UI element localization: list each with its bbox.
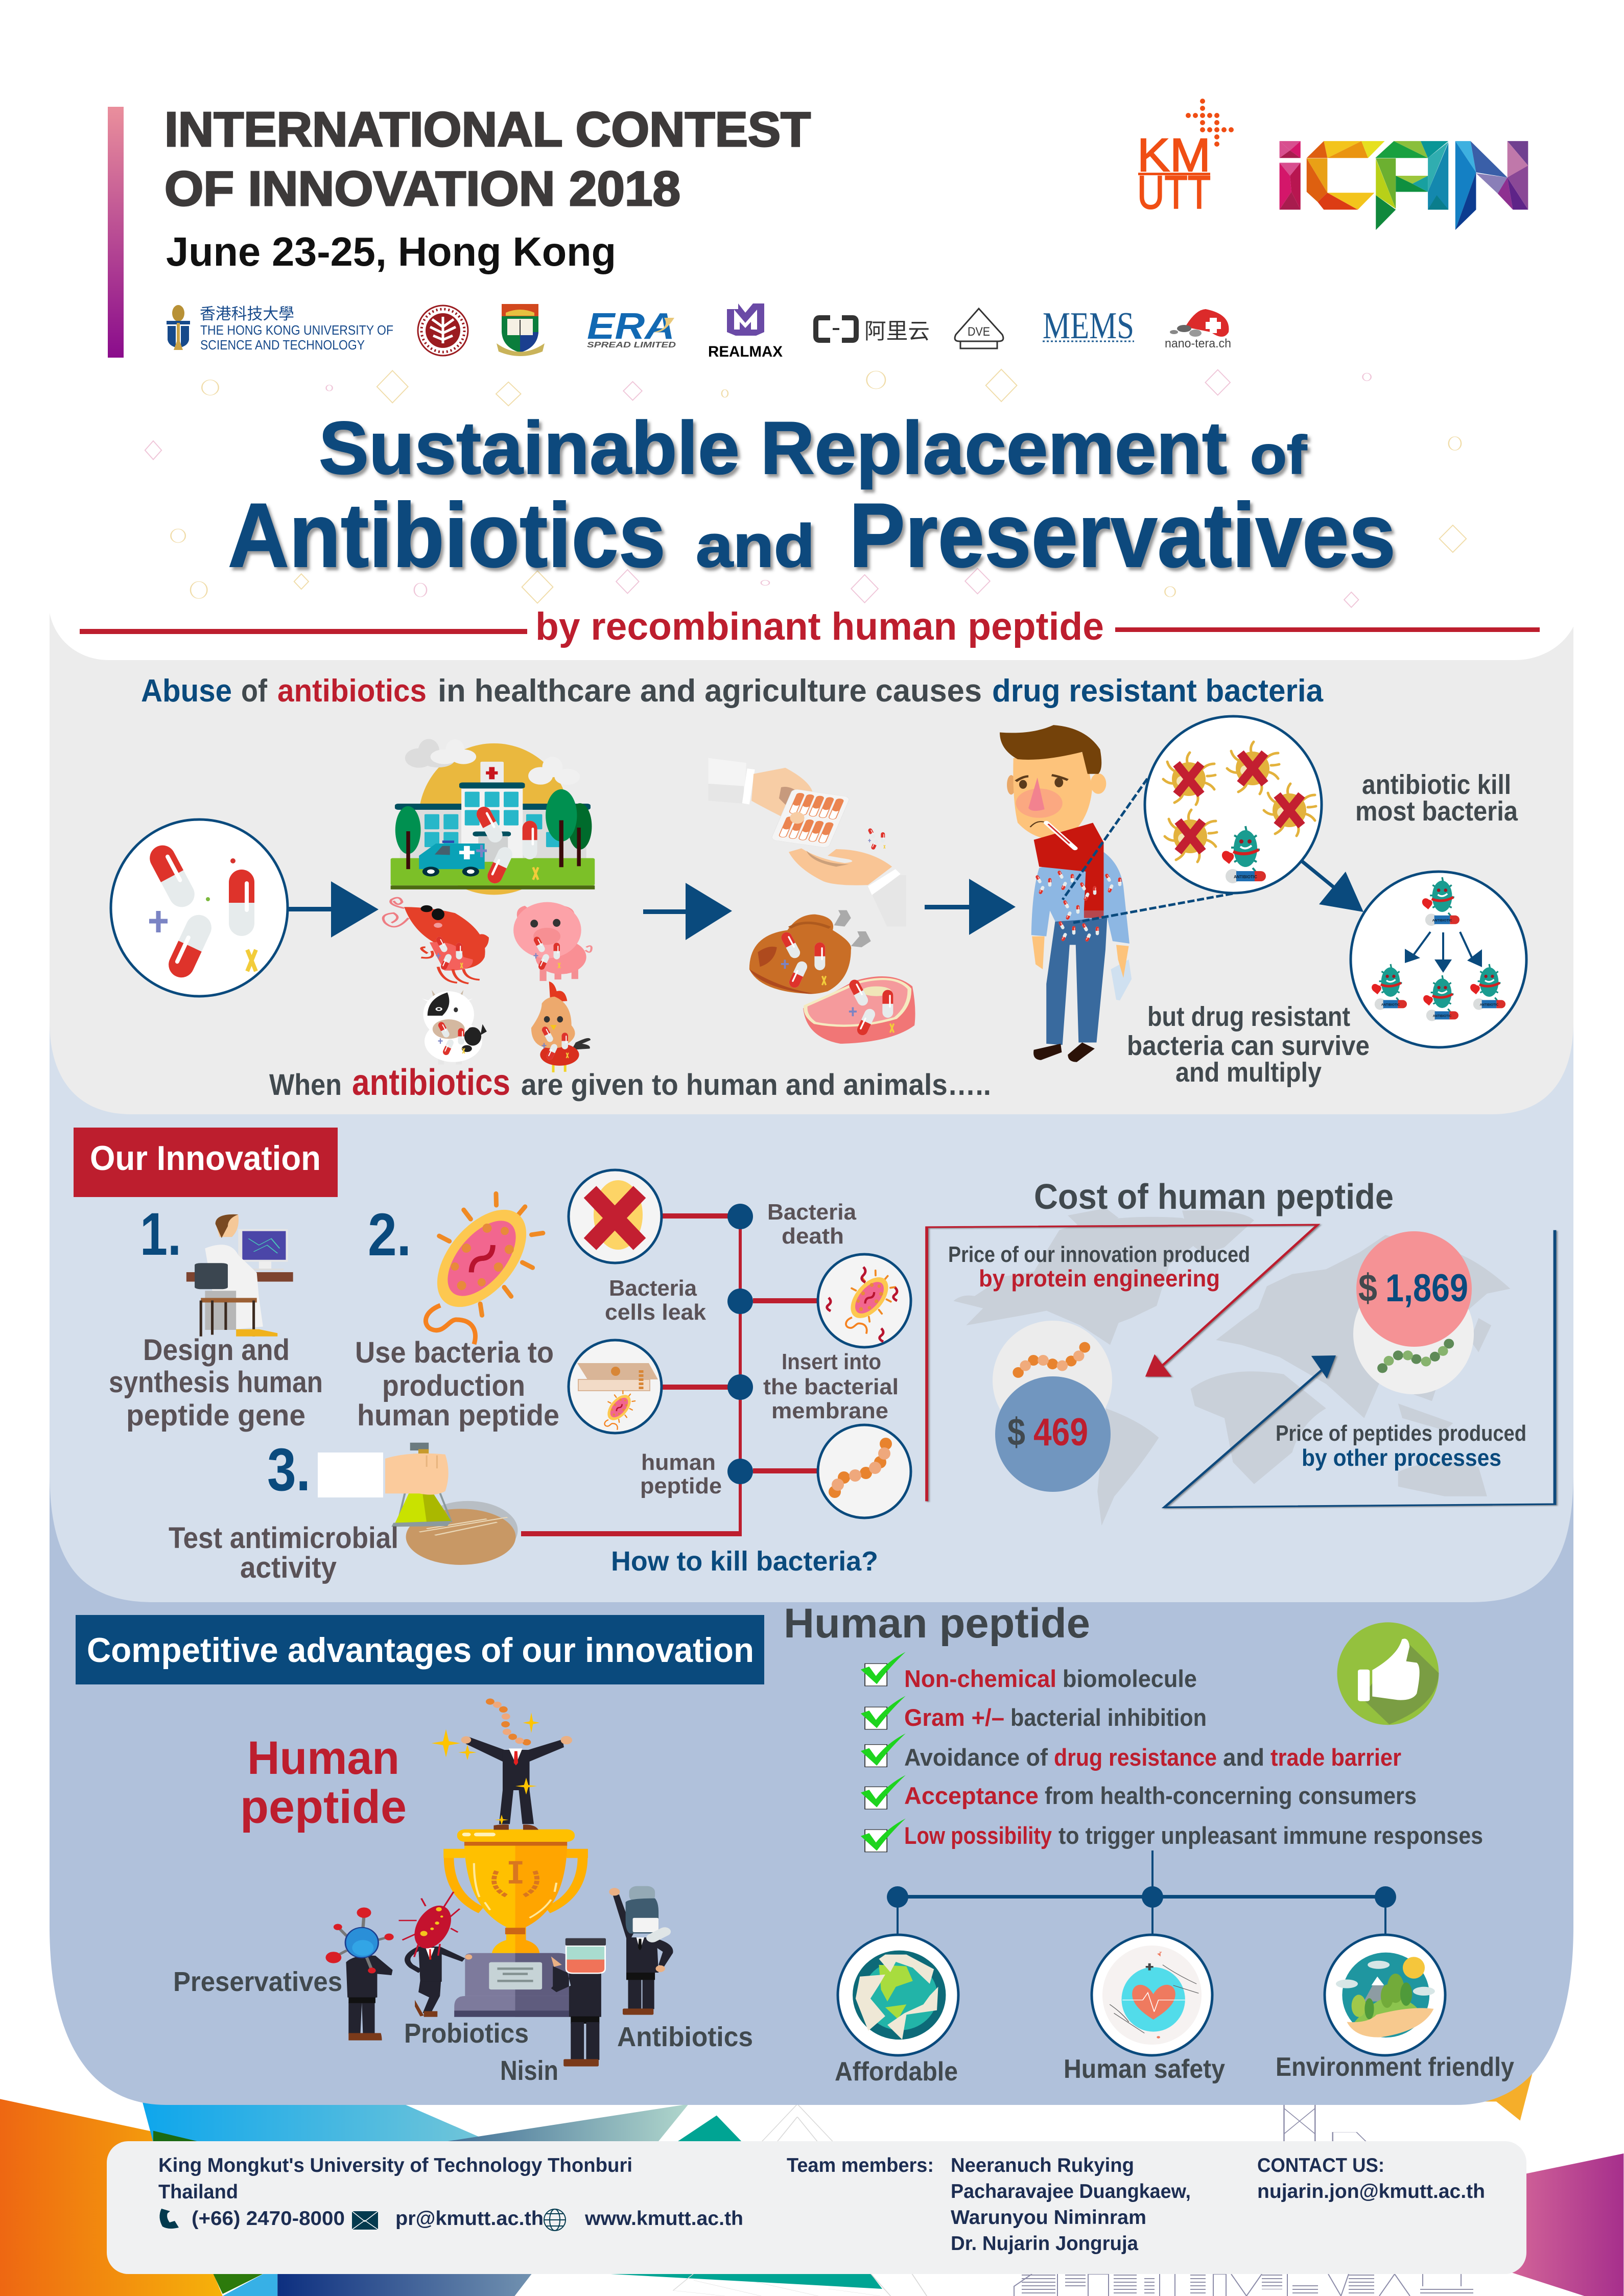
main title [228, 406, 1396, 586]
event title: INTERNATIONAL CONTEST [164, 102, 811, 157]
partner logo: HKU shield [497, 304, 545, 356]
advantage checklist [861, 1652, 1483, 1852]
footer background: city line art [1014, 2274, 1473, 2296]
logo: KMUTT: KM [1137, 129, 1211, 181]
partner logo: MEMS: MEMS [1043, 305, 1134, 347]
trophy [443, 1829, 588, 2017]
footer: team members [787, 2154, 1191, 2255]
price bubble: other processes: 1,869 [1385, 1267, 1468, 1310]
step 2: production [382, 1369, 525, 1402]
circle: bacteria death [569, 1170, 662, 1263]
item 1 [904, 1665, 1197, 1692]
step 3: activity [240, 1551, 337, 1584]
circle: insert into membrane [569, 1340, 662, 1433]
partner logo: Realmax: REALMAX [708, 343, 783, 360]
main title: and [696, 512, 815, 580]
text: antibiotic kill most bacteria: antibiotic kill [1362, 769, 1511, 800]
step 2: 2. [368, 1201, 411, 1269]
footer: contact: CONTACT US: [1257, 2154, 1384, 2176]
event title: OF INNOVATION 2018 [164, 161, 680, 216]
price bubble: our innovation: 469 [1033, 1411, 1088, 1454]
text: but drug resistant bacteria can survive [1127, 1001, 1370, 1088]
heading: our innovation: Our Innovation [90, 1139, 321, 1178]
labels: death [782, 1224, 844, 1249]
pills on man [1035, 870, 1121, 942]
text: price of our innovation: by protein engineering [979, 1265, 1220, 1292]
benefit: environment friendly [1276, 1935, 1514, 2082]
step 3 [169, 1436, 518, 1584]
icon: thumbs up [1337, 1622, 1439, 1725]
benefit: human safety: Human safety [1064, 2054, 1225, 2084]
header accent bar [108, 107, 124, 358]
labels: peptide [640, 1473, 722, 1498]
heading: abuse of antibiotics: Abuse [141, 673, 232, 709]
item 3: trade barrier [1270, 1744, 1401, 1771]
partner logo: DVE: DVE [968, 325, 990, 339]
step 1: peptide gene [126, 1399, 305, 1432]
heading: competitive advantages [76, 1615, 764, 1684]
step 2: Use bacteria to [355, 1336, 554, 1369]
labels: How to kill bacteria? [611, 1546, 878, 1577]
footer: university contact: www.kmutt.ac.th [584, 2208, 743, 2230]
footer: team members: Dr. Nujarin Jongruja [951, 2233, 1138, 2255]
icon: chicken [531, 981, 591, 1072]
step 3: 3. [267, 1436, 311, 1504]
heading: abuse of antibiotics: in healthcare and agriculture causes [438, 673, 982, 709]
circle: human peptide beads [818, 1425, 911, 1518]
text: when antibiotics are given [269, 1062, 991, 1103]
labels: competitors: Preservatives [173, 1966, 342, 1997]
benefit: affordable [835, 1935, 958, 2087]
subtitle with lines: by recombinant human peptide [535, 605, 1104, 648]
circle: bacteria killed [1145, 716, 1322, 893]
arrow to second circle [1302, 861, 1363, 912]
text: price of our innovation [948, 1242, 1250, 1292]
partner logo: nano-tera [1165, 309, 1231, 350]
text: when antibiotics are given: are given to human and animals….. [521, 1068, 991, 1102]
partner logo: Peking University [418, 306, 468, 356]
benefit: human safety [1064, 1935, 1225, 2084]
footer: university contact: (+66) 2470-8000 [192, 2208, 345, 2230]
arrow 1 [288, 881, 379, 938]
partner logo: Alibaba Cloud: 阿里云 [864, 319, 930, 344]
labels: membrane [771, 1398, 888, 1423]
item 5: to trigger unpleasant immune responses [1058, 1822, 1483, 1849]
red arrow frame [927, 1225, 1317, 1501]
text: price of other peptides: Price of peptides produced [1276, 1421, 1526, 1446]
item 1: Non-chemical [904, 1665, 1056, 1692]
footer: team members: Neeranuch Rukying [951, 2154, 1134, 2176]
item 5 [904, 1822, 1483, 1849]
logo: iCAN [1280, 141, 1528, 230]
sparkles [431, 1713, 539, 1825]
heading: human peptide list: Human peptide [784, 1600, 1090, 1647]
labels: competitors: Probiotics [404, 2018, 529, 2049]
benefit: affordable: Affordable [835, 2057, 958, 2087]
footer: university contact [158, 2154, 743, 2231]
partner logo: ERA Spread Limited: SPREAD LIMITED [587, 341, 676, 349]
heading: human peptide red: Human [247, 1732, 399, 1784]
icon: shrimp [383, 898, 489, 983]
step 2 [355, 1177, 561, 1432]
partner logo: HKUST: THE HONG KONG UNIVERSITY OF [200, 322, 393, 338]
item 2: bacterial inhibition [1010, 1704, 1207, 1731]
heading: cost of human peptide: Cost of human peptide [1034, 1177, 1394, 1216]
step 1: 1. [140, 1201, 181, 1268]
icon: hands giving pills [708, 758, 906, 926]
item 2 [904, 1704, 1207, 1731]
heading: our innovation [74, 1128, 338, 1197]
item 4 [904, 1782, 1417, 1809]
footer: university contact: pr@kmutt.ac.th [395, 2208, 544, 2230]
footer: university contact: Thailand [158, 2181, 238, 2203]
partner logo: Alibaba Cloud [816, 318, 930, 344]
text: price of our innovation: Price of our innovation produced [948, 1242, 1250, 1267]
item 1: biomolecule [1063, 1665, 1197, 1692]
icon: roast chicken [749, 910, 871, 994]
icon: cow [422, 990, 487, 1065]
heading: human peptide red [240, 1732, 407, 1833]
partner logo: Realmax [708, 303, 783, 360]
main title: of [1250, 425, 1307, 485]
price bubble: other processes: $ [1358, 1267, 1377, 1310]
white cap above first panel [46, 562, 1579, 660]
step 1: Design and [143, 1333, 290, 1367]
figure: probiotics [399, 1892, 472, 2017]
labels: Bacteria [767, 1200, 857, 1225]
panel: competitive advantages background [50, 1431, 1573, 2105]
partner logo: DVE [955, 309, 1003, 348]
text: price of other peptides [1276, 1421, 1526, 1471]
text: when antibiotics are given: antibiotics [352, 1062, 510, 1103]
heading: abuse of antibiotics: of [241, 673, 267, 709]
item 4: from health-concerning consumers [1045, 1782, 1417, 1809]
benefit: environment friendly: Environment friendly [1276, 2052, 1514, 2082]
item 3: Avoidance of [904, 1744, 1048, 1771]
heading: competitive advantages: Competitive advantages of our innovation [87, 1631, 754, 1670]
item 4: Acceptance [904, 1782, 1039, 1809]
text: price of other peptides: by other processes [1302, 1444, 1501, 1471]
labels [605, 1200, 899, 1577]
benefit connector tree [887, 1850, 1396, 1936]
pills over hospital [474, 804, 538, 886]
circle: resistant bacteria multiply [1351, 872, 1526, 1047]
main title: Preservatives [849, 484, 1396, 586]
labels: Bacteria [609, 1276, 697, 1301]
icon: hospital [391, 739, 595, 895]
price bubble: our innovation [993, 1321, 1112, 1492]
footer: contact [1257, 2154, 1485, 2203]
footer: university contact: King Mongkut's University of Technology Thonburi [158, 2154, 632, 2176]
diagram: how to kill bacteria [521, 1170, 911, 1577]
heading: human peptide red: peptide [240, 1781, 407, 1833]
footer background shapes [0, 2073, 1623, 2296]
blue arrow frame [1164, 1230, 1555, 1507]
main title: Sustainable Replacement [319, 406, 1227, 489]
text: but drug resistant bacteria can survive: and multiply [1175, 1057, 1322, 1088]
arrow 2 [643, 883, 732, 940]
labels: human [641, 1450, 716, 1475]
main title: Antibiotics [228, 484, 666, 586]
step 1: synthesis human [109, 1366, 323, 1399]
event title [164, 102, 811, 274]
footer: team members: Pacharavajee Duangkaew, [951, 2181, 1191, 2203]
item 3 [904, 1744, 1401, 1771]
decorative diamonds and circles [145, 369, 1466, 607]
partner logo: HKUST: SCIENCE AND TECHNOLOGY [200, 337, 365, 353]
heading: abuse of antibiotics [141, 673, 1324, 709]
footer: team members: Warunyou Niminram [951, 2207, 1146, 2229]
winner figure with peptide head [461, 1698, 572, 1830]
partner logo: HKUST [167, 305, 393, 353]
step 1 [109, 1201, 323, 1432]
dashed zoom lines [1063, 779, 1233, 923]
logo: KMUTT: UTT [1137, 167, 1211, 219]
circle: antibiotic capsules [111, 819, 288, 996]
logo: KMUTT [1137, 99, 1234, 219]
text: antibiotic kill most bacteria [1355, 769, 1518, 827]
footer: team members: Team members: [787, 2154, 934, 2176]
item 2: Gram +/– [904, 1704, 1004, 1731]
partner logo: HKUST: 香港科技大學 [200, 305, 294, 323]
world map background [953, 1208, 1510, 1526]
heading: abuse of antibiotics: antibiotics [277, 673, 427, 709]
text: antibiotic kill most bacteria: most bacteria [1355, 796, 1518, 827]
panel: abuse of antibiotics background [50, 613, 1573, 1114]
icon: pig [513, 902, 592, 981]
checkbox icons [861, 1652, 906, 1852]
step 3: Test antimicrobial [169, 1521, 398, 1555]
price bubble: our innovation: $ [1007, 1411, 1025, 1454]
labels: competitors: Antibiotics [617, 2022, 753, 2052]
labels: competitors [173, 1966, 753, 2086]
item 3: and [1223, 1744, 1264, 1771]
figure: preservatives [325, 1908, 394, 2041]
partner logo: nano-tera: nano-tera.ch [1165, 337, 1231, 350]
item 5: Low possibility [904, 1822, 1052, 1849]
footer panel [107, 2141, 1526, 2274]
figure: antibiotics [609, 1886, 673, 2015]
heading: abuse of antibiotics: drug resistant bacteria [992, 673, 1324, 709]
labels: cells leak [605, 1300, 707, 1325]
step 2: human peptide [357, 1399, 559, 1432]
icon: raw meat [803, 976, 915, 1044]
figure: nisin [551, 1938, 606, 2067]
subtitle with lines [80, 605, 1540, 648]
partner logo: ERA Spread Limited: ERA [587, 306, 675, 347]
item 3: drug resistance [1054, 1744, 1217, 1771]
circle: cells leak [818, 1254, 911, 1347]
price bubble: other processes [1353, 1231, 1474, 1394]
footer: contact: nujarin.jon@kmutt.ac.th [1257, 2181, 1485, 2203]
event title: June 23-25, Hong Kong [166, 229, 616, 274]
icon: sick man [1000, 725, 1132, 1062]
labels: the bacterial [763, 1374, 899, 1399]
text: but drug resistant bacteria can survive: but drug resistant [1147, 1001, 1350, 1032]
labels: Insert into [782, 1349, 881, 1374]
arrow 3 [925, 879, 1016, 935]
text: but drug resistant bacteria can survive: bacteria can survive [1127, 1030, 1370, 1061]
labels: competitors: Nisin [500, 2055, 558, 2086]
panel: our innovation background [50, 1022, 1573, 1602]
text: when antibiotics are given: When [269, 1068, 342, 1102]
